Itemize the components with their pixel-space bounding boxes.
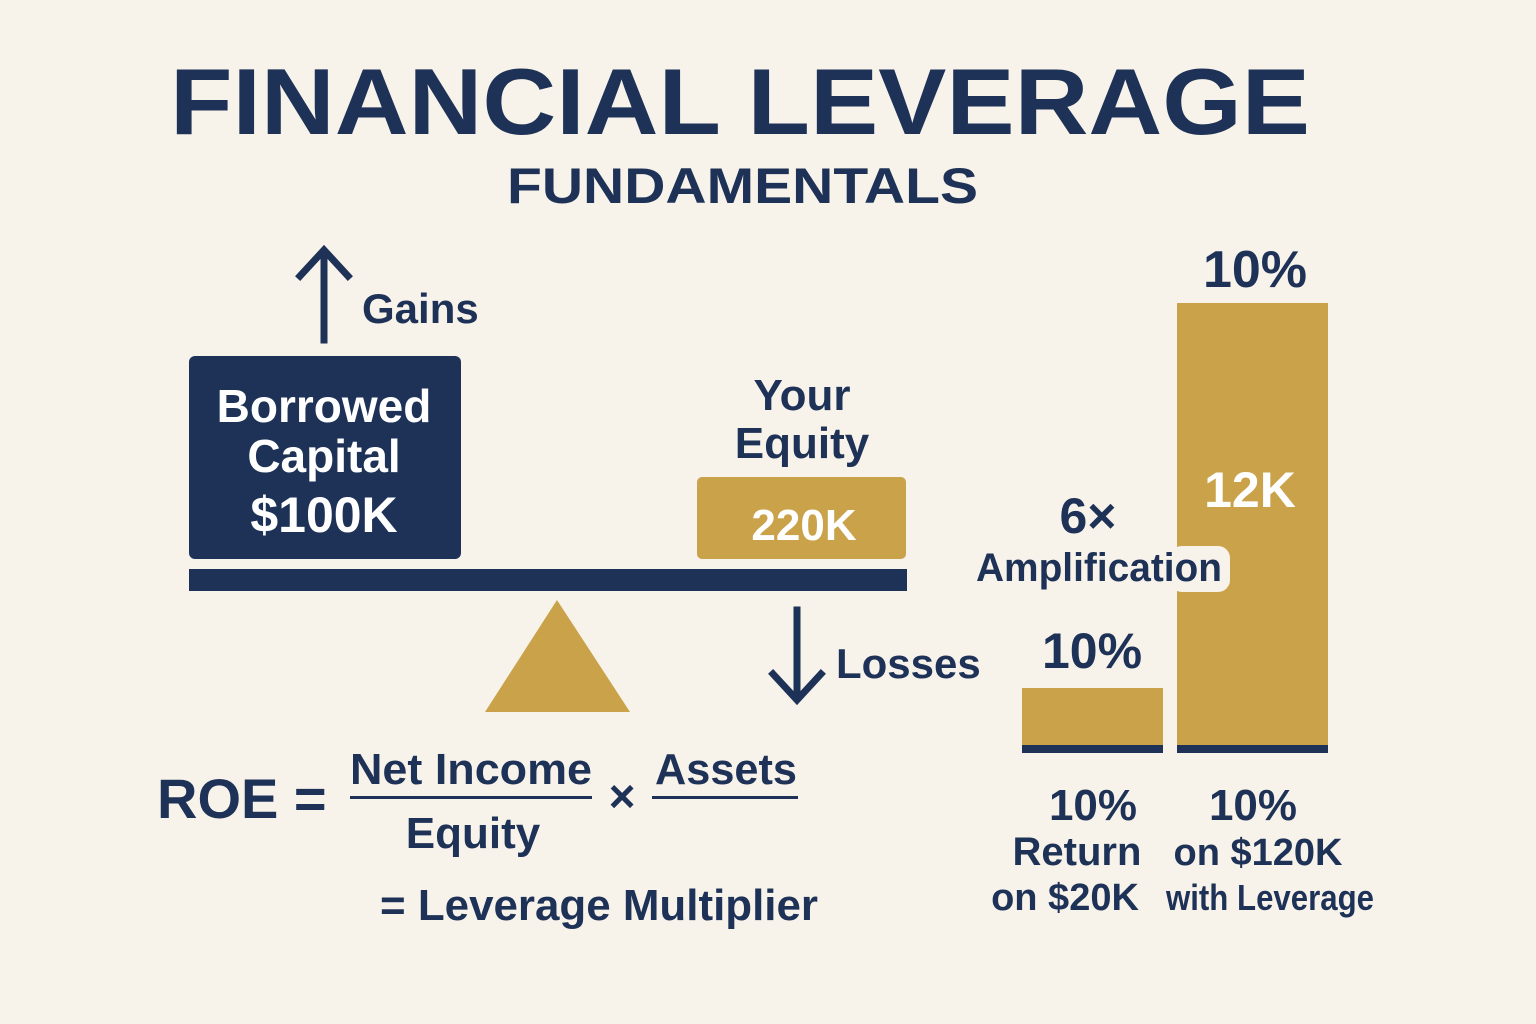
ROE formula: = Leverage Multiplier: [380, 881, 818, 930]
icon: losses arrow: [773, 610, 821, 700]
bar label: unlevered: Return: [1013, 830, 1141, 874]
ROE formula: ×: [609, 770, 635, 822]
bar chart: [1022, 241, 1328, 753]
losses label: Losses: [836, 640, 981, 687]
bar chart: 10%: [1042, 623, 1142, 679]
seesaw beam: [189, 569, 907, 591]
bar label: unlevered: 10%: [1049, 781, 1137, 830]
bar label: unlevered: on $20K: [991, 877, 1139, 919]
ROE formula: Equity: [406, 809, 541, 858]
title: FINANCIAL LEVERAGE: [170, 49, 1310, 154]
borrowed capital box: [189, 356, 461, 559]
amplification callout: Amplification: [976, 546, 1222, 590]
bar chart: 10%: [1203, 241, 1307, 299]
bar label: unlevered: [991, 781, 1141, 919]
ROE formula: ROE =: [157, 767, 327, 830]
equity box: 220K: [751, 501, 857, 550]
icon: gains arrow: [300, 250, 348, 340]
ROE formula: [157, 745, 818, 930]
amplification callout: 6×: [1059, 488, 1117, 544]
gains label: Gains: [362, 285, 479, 332]
borrowed capital box: Borrowed: [217, 380, 431, 432]
bar label: levered: with Leverage: [1165, 877, 1374, 918]
equity box: [697, 477, 906, 559]
bar label: levered: on $120K: [1174, 832, 1343, 874]
bar label: levered: [1165, 781, 1374, 918]
borrowed capital box: Capital: [247, 430, 401, 482]
bar chart: 12K: [1204, 462, 1296, 518]
your equity label: Your: [754, 371, 850, 420]
subtitle: FUNDAMENTALS: [507, 158, 978, 214]
fulcrum triangle: [485, 600, 630, 712]
ROE formula: Assets: [655, 745, 797, 794]
borrowed capital box: $100K: [250, 487, 398, 543]
amplification callout: [976, 488, 1230, 592]
your equity label: Equity: [735, 419, 870, 468]
ROE formula: Net Income: [350, 745, 592, 794]
your equity label: [735, 371, 870, 468]
bar label: levered: 10%: [1209, 781, 1297, 830]
